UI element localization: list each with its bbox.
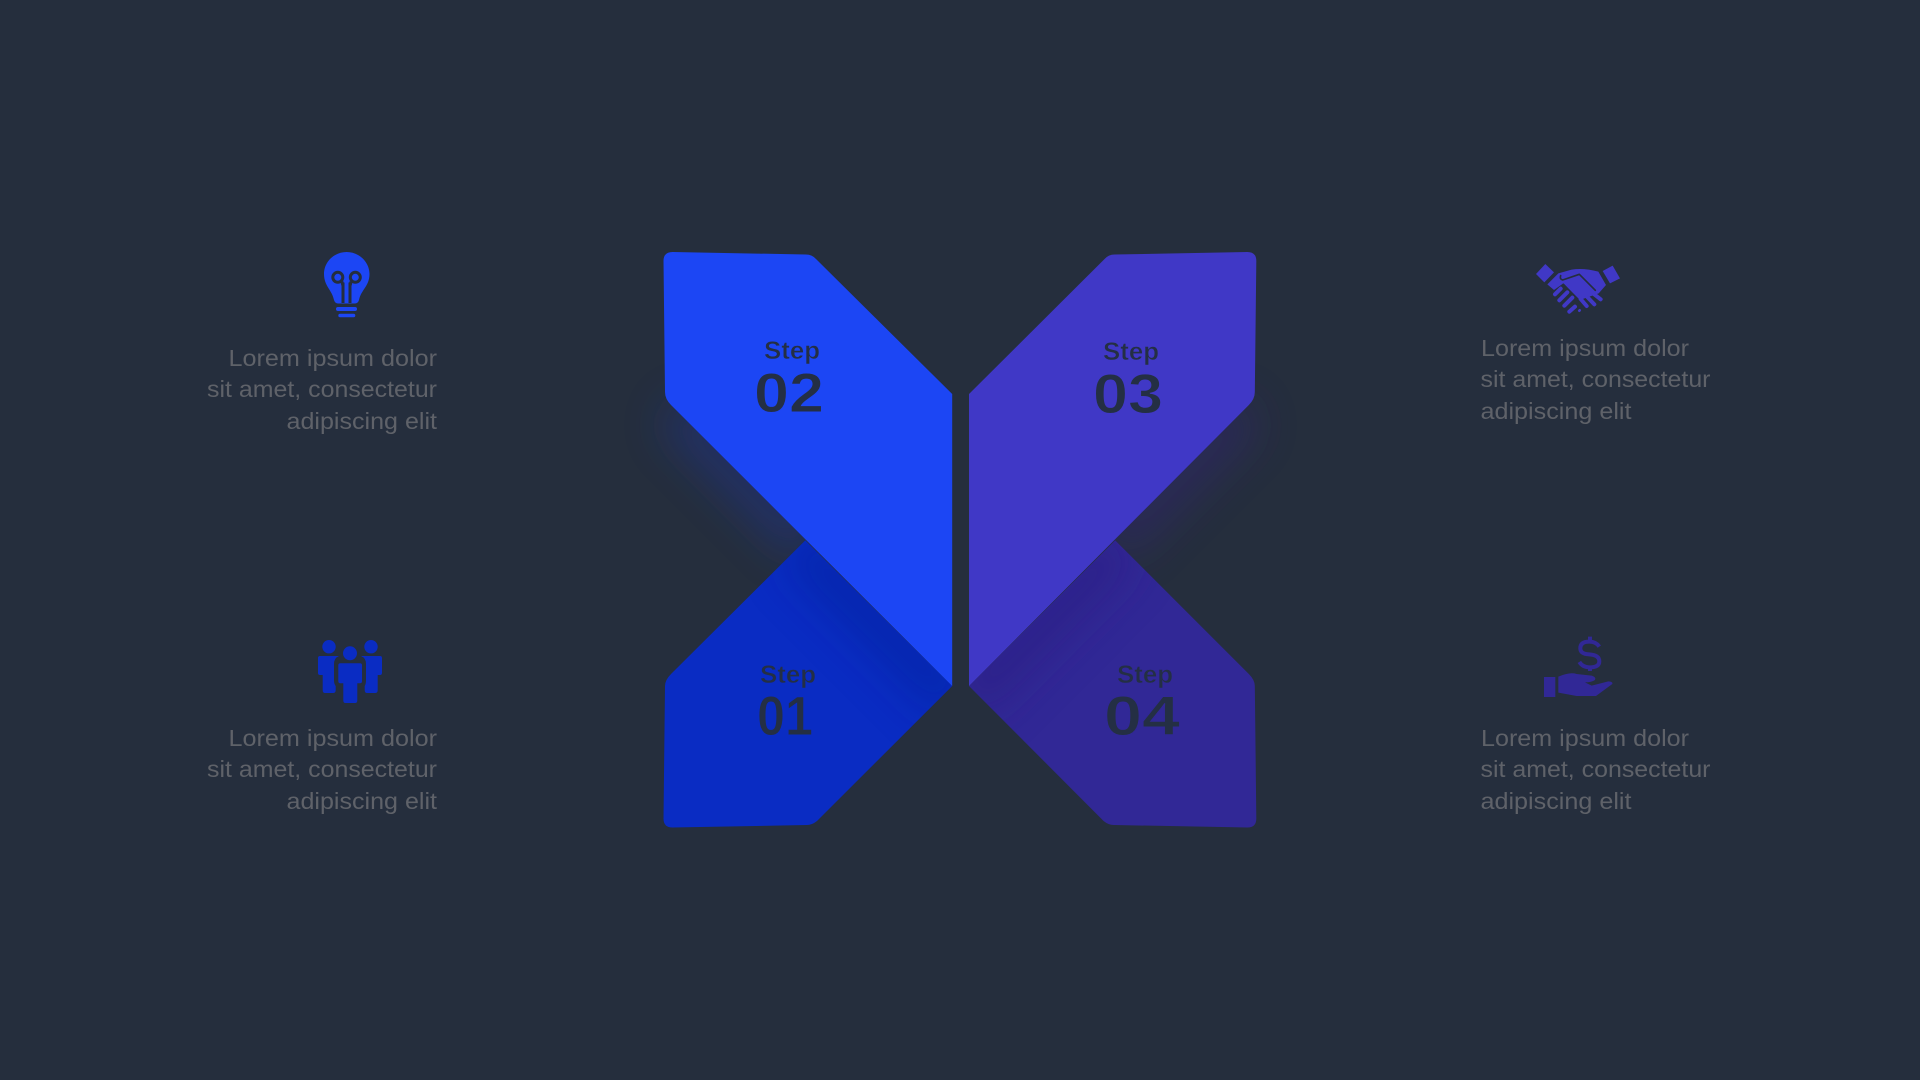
shadow: right xyxy=(1096,395,1261,560)
label: step 02: 02 xyxy=(754,361,824,424)
icon: hand holding dollar xyxy=(1544,637,1612,697)
text: upper left description xyxy=(207,345,437,434)
text: lower right description: Lorem ipsum dolor xyxy=(1481,725,1689,751)
text: lower left description xyxy=(207,725,437,814)
shadow on step 01 xyxy=(788,541,952,710)
label: step 02: Step xyxy=(764,337,820,365)
label: step 02 xyxy=(754,337,824,424)
label: step 04: Step xyxy=(1117,661,1173,689)
shadow: left xyxy=(660,395,825,560)
panel: step 03 xyxy=(969,252,1256,686)
text: lower right description xyxy=(1480,725,1711,814)
label: step 03: Step xyxy=(1103,338,1159,366)
text: upper left description: Lorem ipsum dolor xyxy=(228,345,437,371)
icon: light bulb xyxy=(324,252,370,317)
text: upper right description: Lorem ipsum dolor xyxy=(1481,335,1689,361)
text: lower right description: adipiscing elit xyxy=(1480,788,1632,814)
text: lower left description: Lorem ipsum dolor xyxy=(228,725,437,751)
text: upper right description: adipiscing elit xyxy=(1480,398,1632,424)
text: upper right description xyxy=(1480,335,1711,424)
text: upper right description: sit amet, consectetur xyxy=(1480,366,1711,392)
panel: step 01 xyxy=(664,540,952,828)
label: step 03: 03 xyxy=(1093,362,1163,425)
label: step 01: Step xyxy=(760,661,816,689)
text: lower left description: sit amet, consectetur xyxy=(207,756,437,782)
icon: team of people xyxy=(318,640,382,703)
shadow on step 04 xyxy=(982,561,1104,684)
panel: step 02 xyxy=(664,252,952,686)
text: upper left description: adipiscing elit xyxy=(286,408,437,434)
panel: step 04 xyxy=(969,540,1256,828)
text: upper left description: sit amet, consectetur xyxy=(207,376,437,402)
text: lower right description: sit amet, consectetur xyxy=(1480,756,1711,782)
panel: step shapes xyxy=(660,252,1261,828)
label: step 01: 01 xyxy=(757,684,813,747)
label: step 04 xyxy=(1104,661,1180,747)
label: step 03 xyxy=(1093,338,1163,425)
text: lower left description: adipiscing elit xyxy=(286,788,437,814)
label: step 04: 04 xyxy=(1104,684,1180,747)
icon: handshake xyxy=(1536,264,1620,312)
